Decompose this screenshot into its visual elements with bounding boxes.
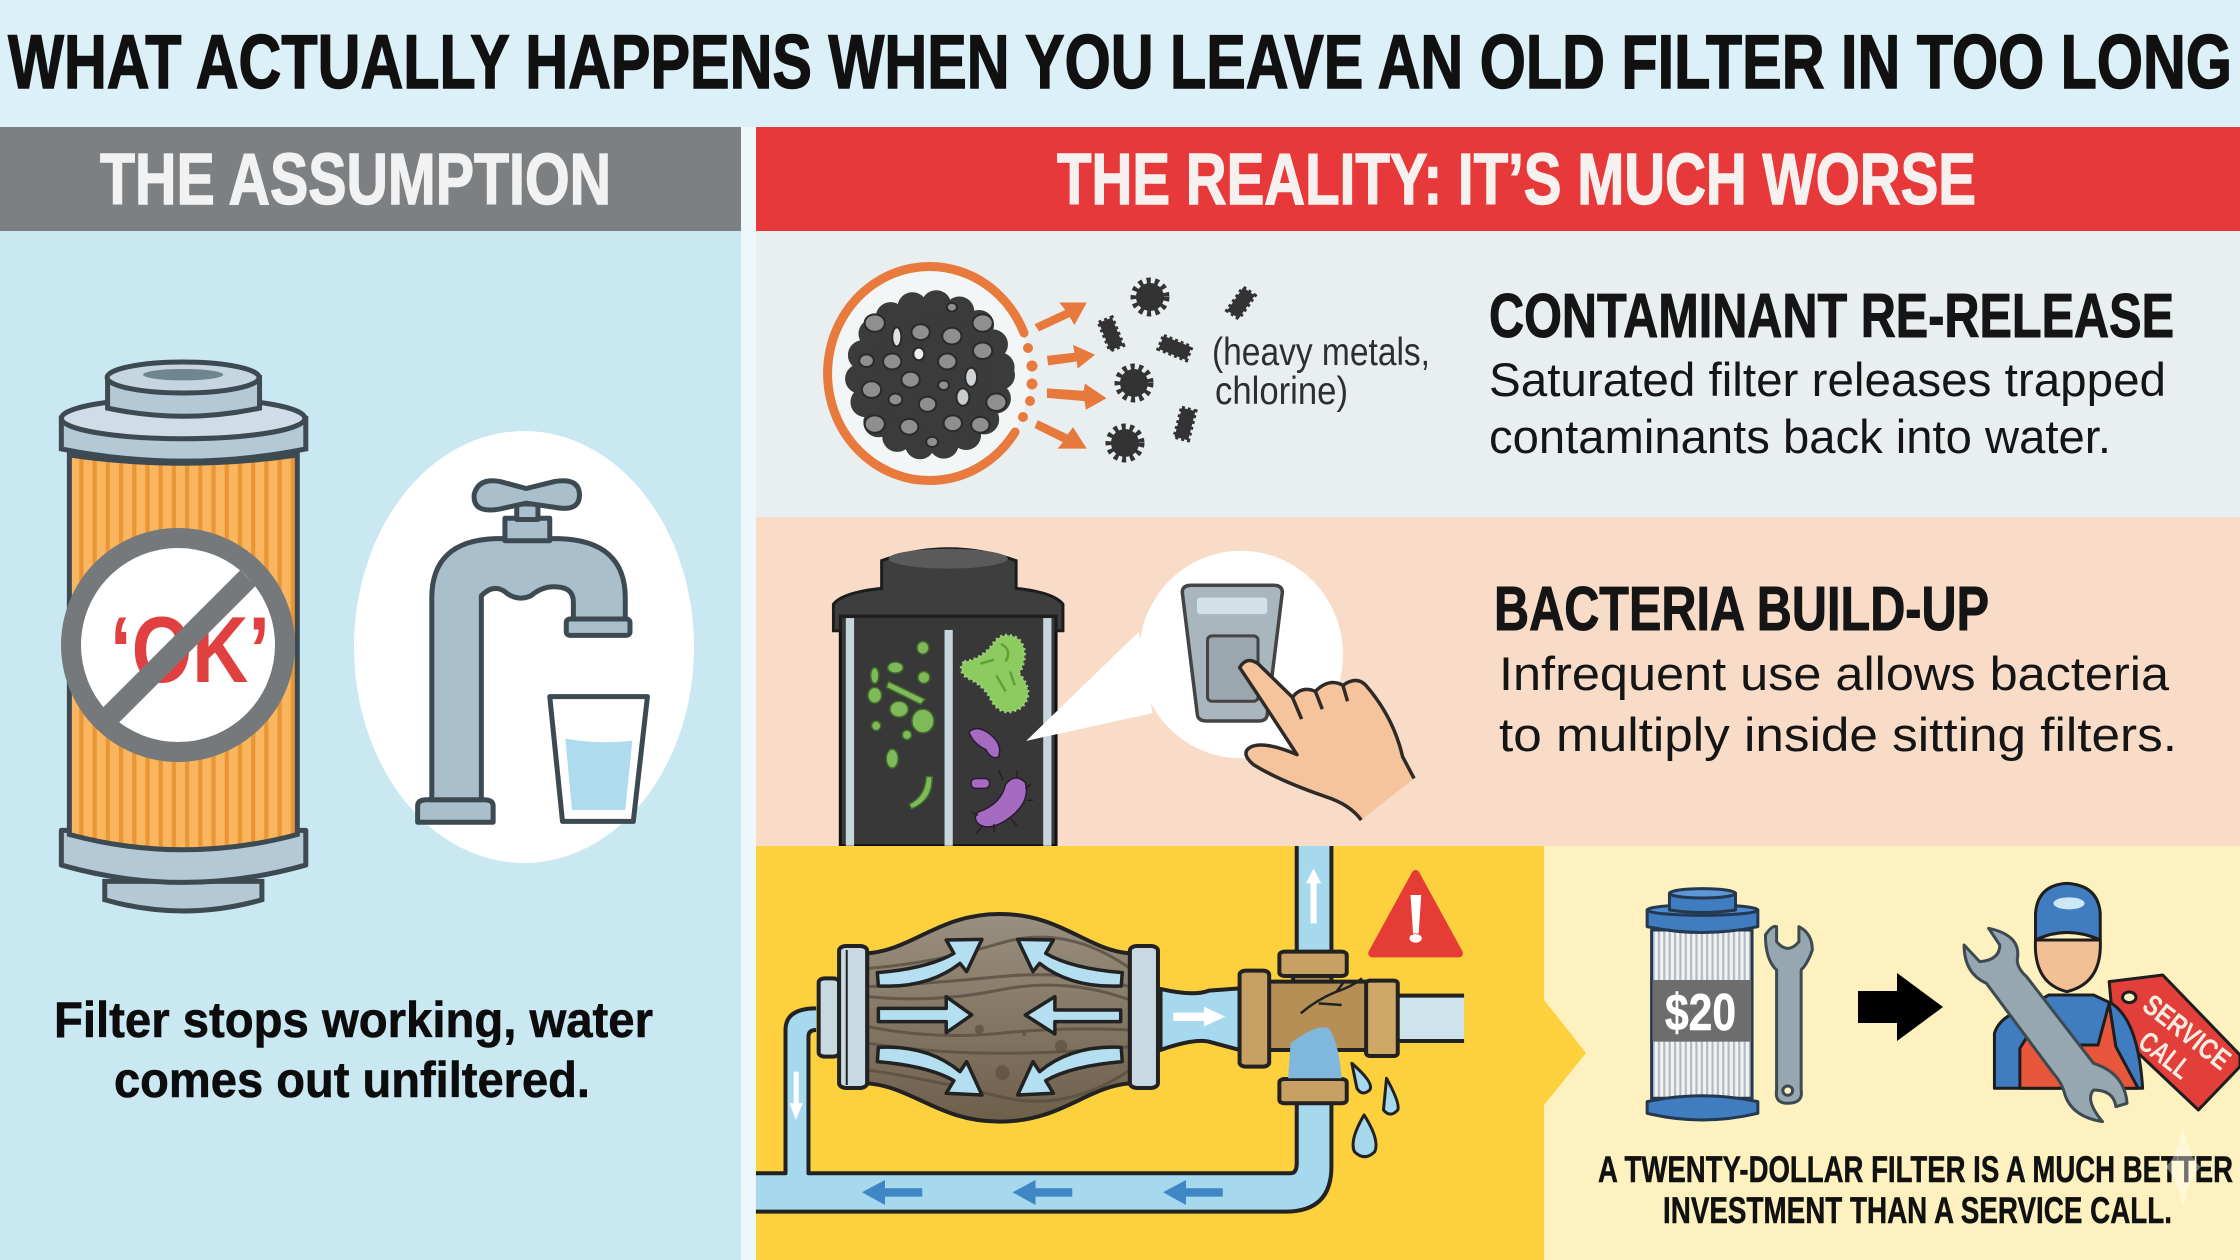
text: heavy metals note: chlorine) xyxy=(1215,370,1348,413)
text: bacteria build-up: to multiply inside sitting filters. xyxy=(1499,708,2177,761)
text: heavy metals note xyxy=(1212,331,1430,413)
right pipe stub xyxy=(1398,996,1464,1041)
text: contaminant re-release: contaminants back into water. xyxy=(1489,410,2111,463)
text: cost conclusion xyxy=(1598,1149,2233,1231)
heading bar: the assumption xyxy=(0,127,741,231)
icon: white oval backdrop xyxy=(354,431,694,863)
heading bar: the reality: THE REALITY: IT’S MUCH WORSE xyxy=(1057,140,1976,220)
heading bar: the reality xyxy=(756,127,2240,231)
heading bar: the assumption: THE ASSUMPTION xyxy=(100,140,611,220)
icon: service technician with wrench and price tag xyxy=(1964,883,2240,1122)
water drops xyxy=(1352,1063,1398,1157)
text: bacteria build-up: Infrequent use allows bacteria xyxy=(1499,647,2170,700)
icon: warning triangle xyxy=(1372,874,1459,953)
icon: speech bubble xyxy=(1026,551,1343,758)
text: bacteria build-up: BACTERIA BUILD-UP xyxy=(1494,575,1989,644)
icon: prohibition sign over OK xyxy=(71,538,285,752)
panel: bacteria build-up xyxy=(756,517,2240,846)
panel: contaminant re-release xyxy=(756,231,2240,517)
purple bacteria xyxy=(969,729,1033,834)
text: $20 label: $20 xyxy=(1665,984,1736,1042)
text: heavy metals note: (heavy metals, xyxy=(1212,331,1430,374)
green bacteria xyxy=(868,635,1028,809)
text: assumption caption xyxy=(54,992,653,1108)
text: assumption caption: comes out unfiltered. xyxy=(114,1052,590,1108)
icon: service technician with wrench and price tag: CALL xyxy=(2132,1026,2197,1086)
panel: burst pipe xyxy=(756,846,1544,1260)
illustration: clogged filter bursting pipe xyxy=(756,846,1464,1212)
icon: orange filter cartridge with crossed-out OK xyxy=(61,362,306,911)
divider gap xyxy=(741,127,756,1260)
text: contaminant re-release: Saturated filter releases trapped xyxy=(1489,353,2166,406)
text: contaminant re-release xyxy=(1489,282,2174,463)
icon: saturated carbon block with orange ring xyxy=(828,267,1038,481)
arrow: black arrow xyxy=(1858,973,1943,1041)
clogged bulging filter xyxy=(819,914,1158,1122)
panel: cost comparison xyxy=(1544,846,2240,1260)
text: assumption caption: Filter stops working, water xyxy=(54,992,653,1048)
panel: the assumption xyxy=(0,127,741,1260)
icon: switch pressed by hand xyxy=(1182,585,1414,820)
text: bacteria build-up xyxy=(1494,575,2177,761)
water pipes xyxy=(756,846,1331,1212)
outlet pipe xyxy=(1161,988,1240,1050)
icon: released contaminant particles xyxy=(1099,283,1255,457)
icon: dark filter housing with bacteria xyxy=(833,549,1063,846)
icon: orange release arrows xyxy=(1034,302,1107,449)
arrow: yellow pointer xyxy=(1544,1000,1586,1105)
icon: twenty-dollar filter and wrench xyxy=(1647,889,1812,1120)
icon: faint sparkle watermark xyxy=(2165,1127,2201,1207)
icon: faucet and glass of water xyxy=(418,481,647,822)
cracked brass fitting xyxy=(1240,952,1398,1103)
icon: prohibition sign over OK: ‘OK’ xyxy=(110,597,270,702)
